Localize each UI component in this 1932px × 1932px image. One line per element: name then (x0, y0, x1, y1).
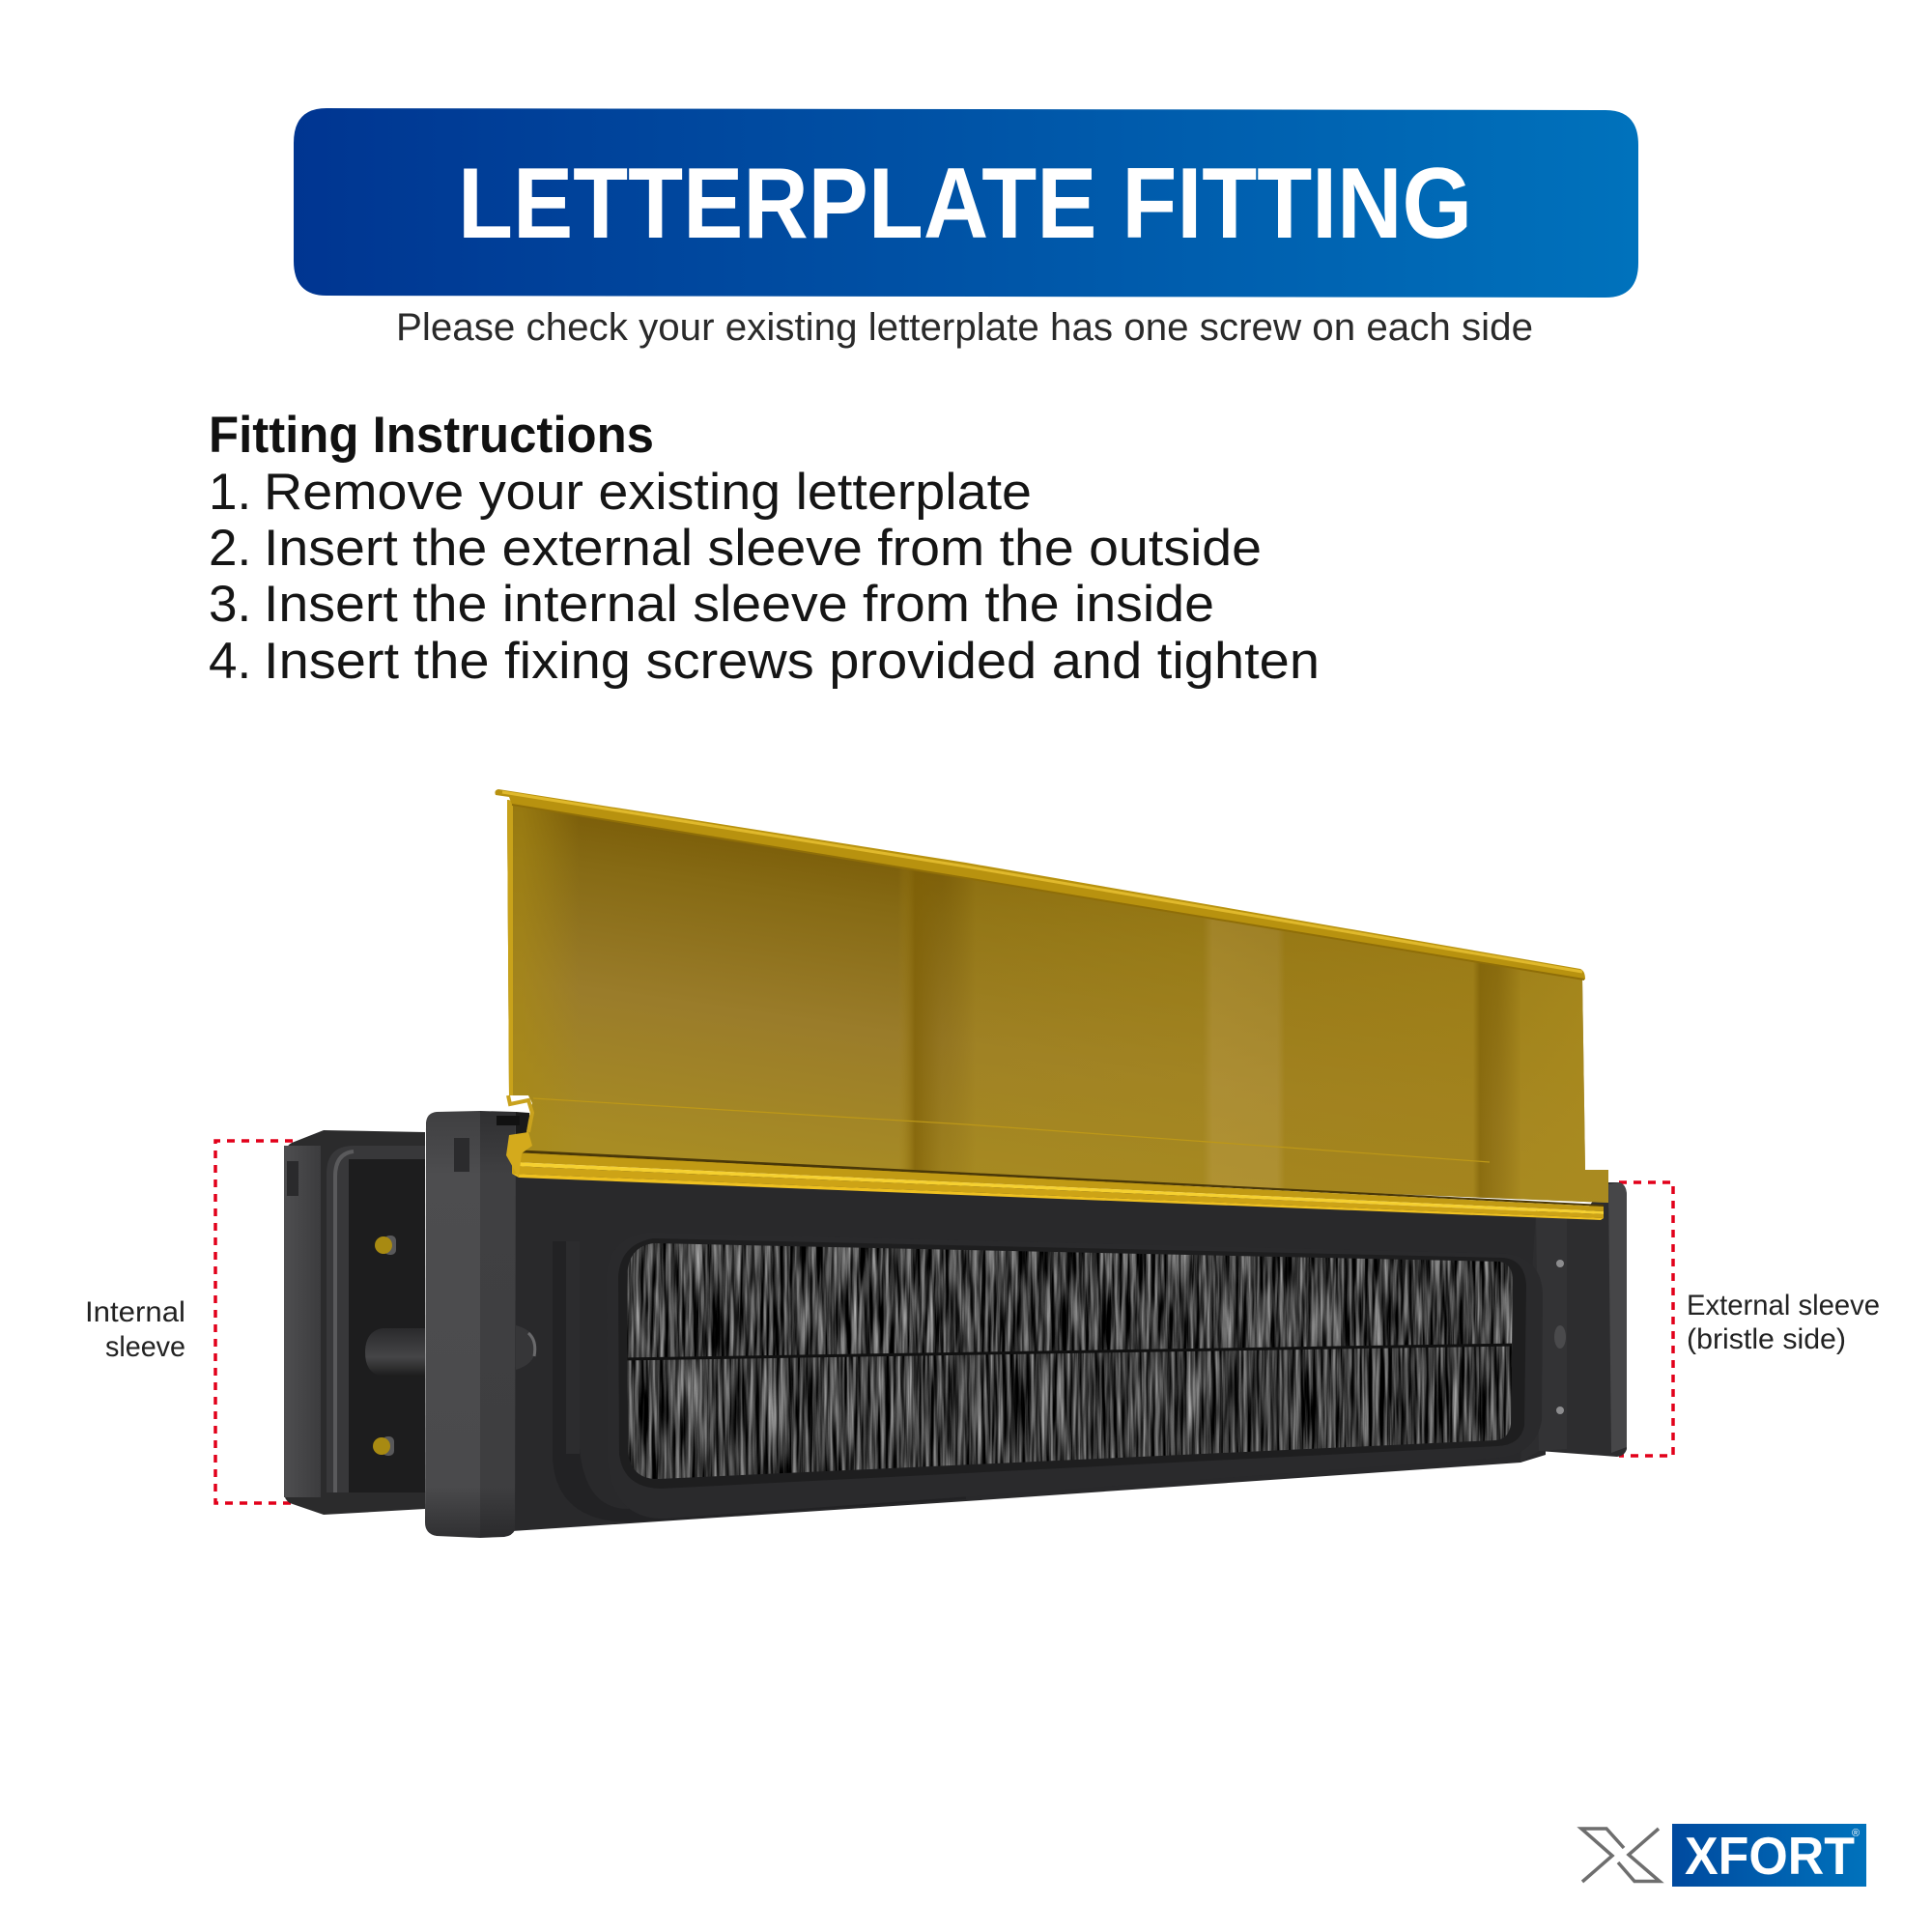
internal sleeve front post (425, 1111, 529, 1538)
hinge rail (506, 1132, 1604, 1220)
step 4: 4. (209, 633, 251, 690)
internal sleeve label: Internal (85, 1296, 185, 1328)
title banner (294, 108, 1638, 298)
external sleeve front plate (512, 1164, 1627, 1531)
brush surround (607, 1233, 1543, 1519)
fitting instructions (209, 407, 1320, 690)
flap panel shading (507, 792, 1613, 1217)
subtitle: Please check your existing letterplate has one screw on each side (396, 306, 1533, 349)
step 1: 1. (209, 464, 251, 521)
internal sleeve bracket (215, 1141, 293, 1503)
external sleeve label (1687, 1290, 1880, 1355)
logo wordmark: XFORT (1685, 1826, 1855, 1886)
right end piece (1520, 1182, 1627, 1463)
step 2: Insert the external sleeve from the outside (264, 520, 1262, 577)
xfort logo (1581, 1824, 1866, 1887)
letterplate product illustration (284, 789, 1627, 1538)
external sleeve label: (bristle side) (1687, 1323, 1846, 1355)
step 3: 3. (209, 576, 251, 633)
banner background (294, 108, 1638, 298)
registered mark: ® (1852, 1828, 1860, 1839)
top lip (495, 789, 1585, 980)
step 4: Insert the fixing screws provided and tighten (264, 633, 1320, 690)
gold flap (495, 789, 1613, 1220)
internal sleeve back block (284, 1130, 425, 1515)
bristle brush (618, 1236, 1521, 1488)
step 1: Remove your existing letterplate (264, 464, 1032, 521)
instructions heading: Fitting Instructions (209, 407, 654, 464)
fixing post shaft (365, 1328, 425, 1377)
logo wordmark box (1672, 1824, 1866, 1887)
flap hook (508, 1095, 532, 1132)
internal sleeve label: sleeve (105, 1331, 185, 1363)
internal sleeve label (85, 1296, 185, 1363)
screw hole lower (373, 1436, 394, 1456)
outer flange (553, 1241, 966, 1522)
external sleeve bracket (1619, 1182, 1673, 1456)
flap panel (507, 800, 1608, 1203)
external sleeve label: External sleeve (1687, 1290, 1880, 1321)
step 2: 2. (209, 520, 251, 577)
screw hole upper (375, 1236, 396, 1255)
logo x mark (1581, 1829, 1660, 1882)
side fixing screw (516, 1325, 536, 1370)
title: LETTERPLATE FITTING (458, 148, 1472, 260)
step 3: Insert the internal sleeve from the inside (264, 576, 1214, 633)
